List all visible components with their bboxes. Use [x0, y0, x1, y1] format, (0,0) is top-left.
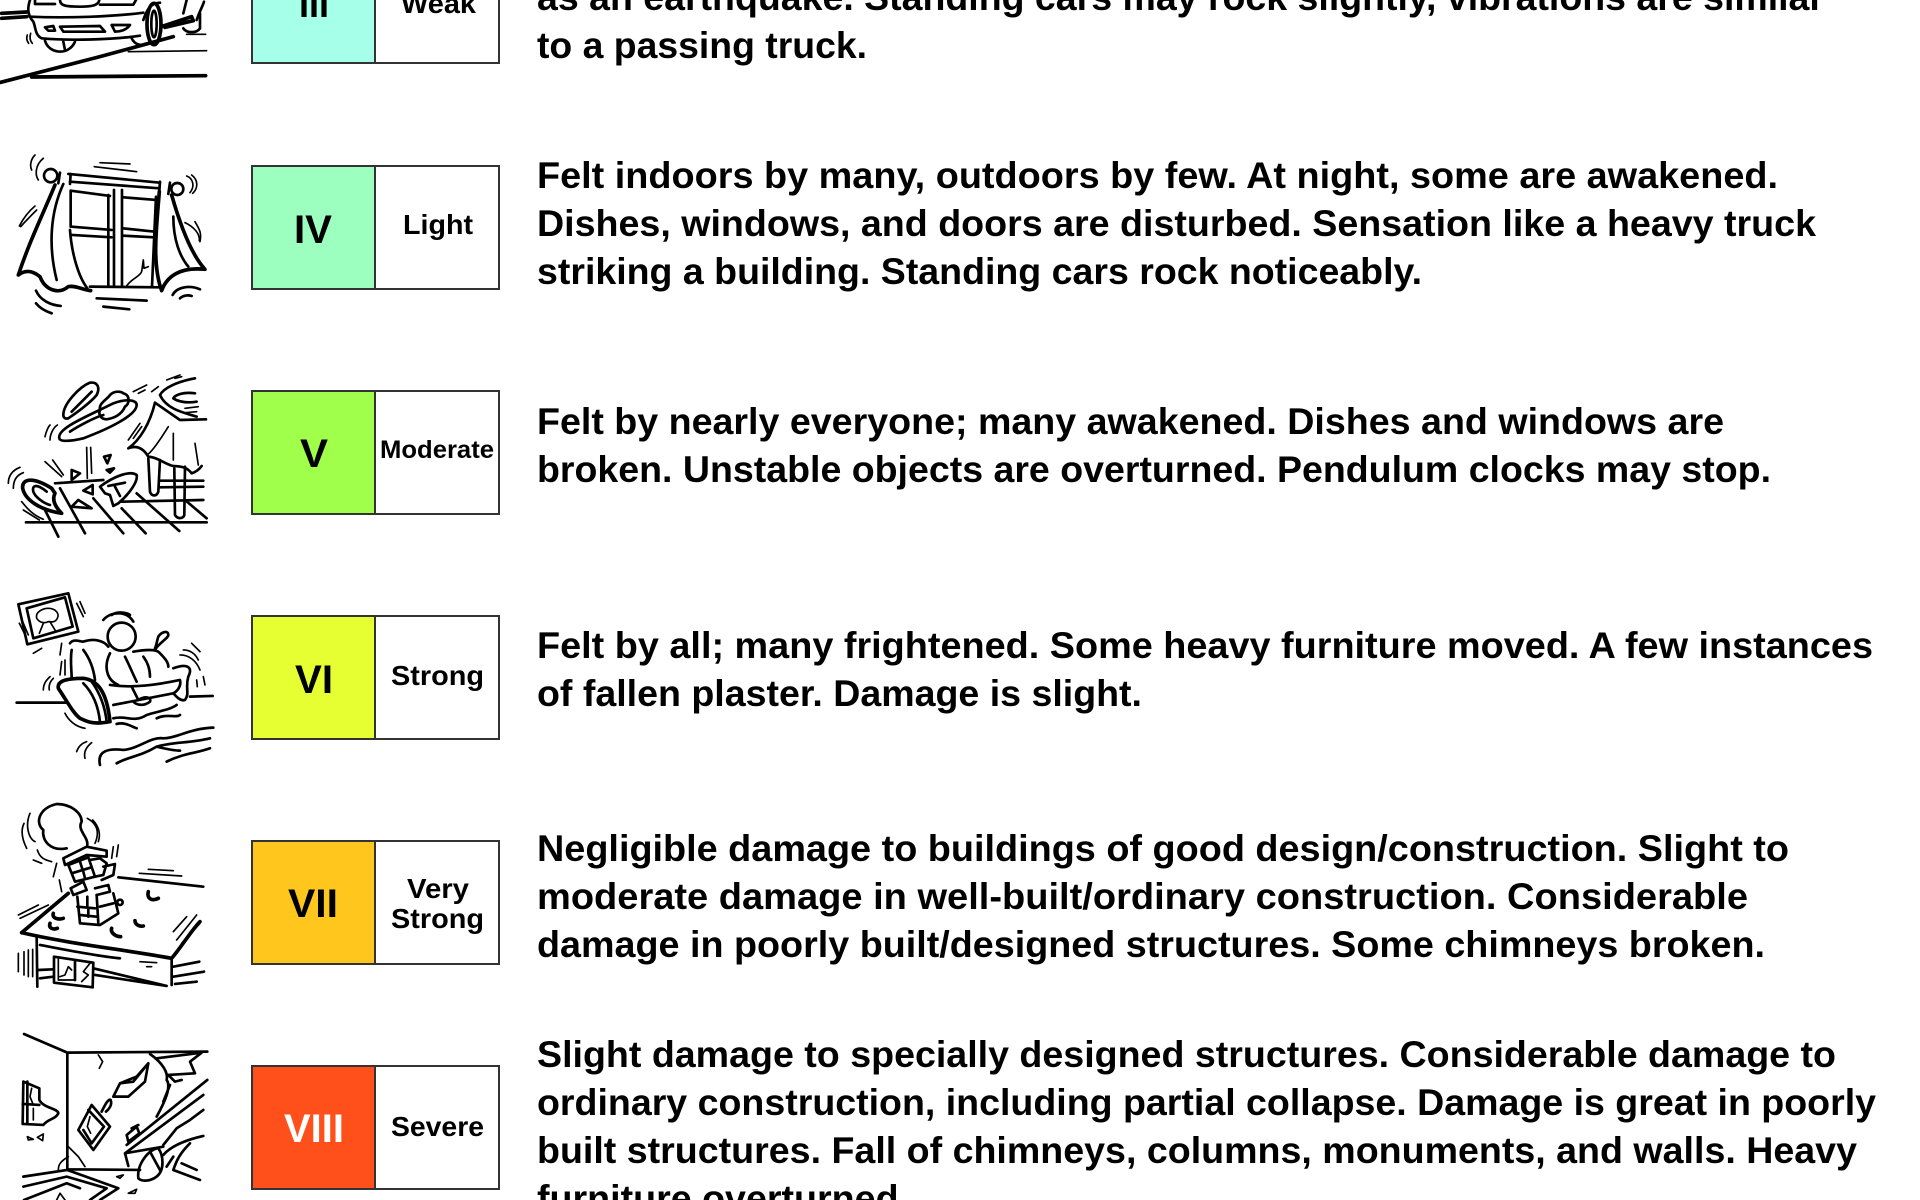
numeral box VII: Very — [407, 873, 469, 904]
numeral box VIII: VIII — [284, 1107, 344, 1151]
description VI: of fallen plaster. Damage is slight. — [537, 673, 1142, 714]
description VI: Felt by all; many frightened. Some heavy furniture moved. A few instances — [537, 625, 1873, 666]
description VII: Negligible damage to buildings of good design/construction. Slight to — [537, 828, 1789, 869]
numeral box IV: IV — [294, 208, 332, 252]
description VIII — [537, 1034, 1876, 1200]
numeral box VIII: Severe — [391, 1111, 484, 1142]
numeral box VIII — [252, 1066, 499, 1189]
description VII — [537, 828, 1789, 965]
description VII: moderate damage in well-built/ordinary construction. Considerable — [537, 876, 1748, 917]
description IV: Dishes, windows, and doors are disturbed. Sensation like a heavy truck — [537, 203, 1816, 244]
description V: Felt by nearly everyone; many awakened. Dishes and windows are — [537, 401, 1724, 442]
description VI — [537, 625, 1873, 714]
numeral box VII: VII — [288, 882, 338, 926]
description VIII: ordinary construction, including partial collapse. Damage is great in poorly — [537, 1082, 1876, 1123]
numeral box V: Moderate — [380, 436, 494, 464]
numeral box III — [252, 0, 499, 63]
numeral box VII — [252, 841, 499, 964]
description VII: damage in poorly built/designed structures. Some chimneys broken. — [537, 924, 1765, 965]
description III — [537, 0, 1824, 66]
description IV: striking a building. Standing cars rock noticeably. — [537, 251, 1422, 292]
numeral box V: V — [300, 432, 328, 476]
description IV — [537, 155, 1816, 292]
description VIII: Slight damage to specially designed structures. Considerable damage to — [537, 1034, 1836, 1075]
numeral box VI — [252, 616, 499, 739]
icon: rocking car — [1, 0, 207, 82]
numeral box VII: Strong — [391, 903, 484, 934]
icon: shaking window and curtains — [18, 155, 205, 313]
row: VII Very Strong — [18, 804, 1789, 987]
icon: person on shaking sofa — [17, 593, 213, 765]
row: IV Light — [18, 155, 1816, 313]
description VIII: built structures. Fall of chimneys, columns, monuments, and walls. Heavy — [537, 1130, 1857, 1171]
numeral box VI: Strong — [391, 660, 484, 691]
numeral box IV: Light — [403, 209, 473, 240]
row: VIII Severe — [23, 1034, 1876, 1200]
numeral box IV — [252, 166, 499, 289]
description V: broken. Unstable objects are overturned. Pendulum clocks may stop. — [537, 449, 1771, 490]
icon: broken chimney on roof — [18, 804, 204, 987]
icon: falling dishes and table — [8, 375, 207, 537]
numeral box VI: VI — [295, 658, 333, 702]
row: III Weak — [1, 0, 1824, 82]
description V — [537, 401, 1771, 490]
numeral box V — [252, 391, 499, 514]
description III: to a passing truck. — [537, 25, 867, 66]
icon: collapsing room — [23, 1034, 207, 1200]
row: V Moderate — [8, 375, 1771, 537]
row: VI Strong — [17, 593, 1873, 765]
description IV: Felt indoors by many, outdoors by few. At night, some are awakened. — [537, 155, 1778, 196]
